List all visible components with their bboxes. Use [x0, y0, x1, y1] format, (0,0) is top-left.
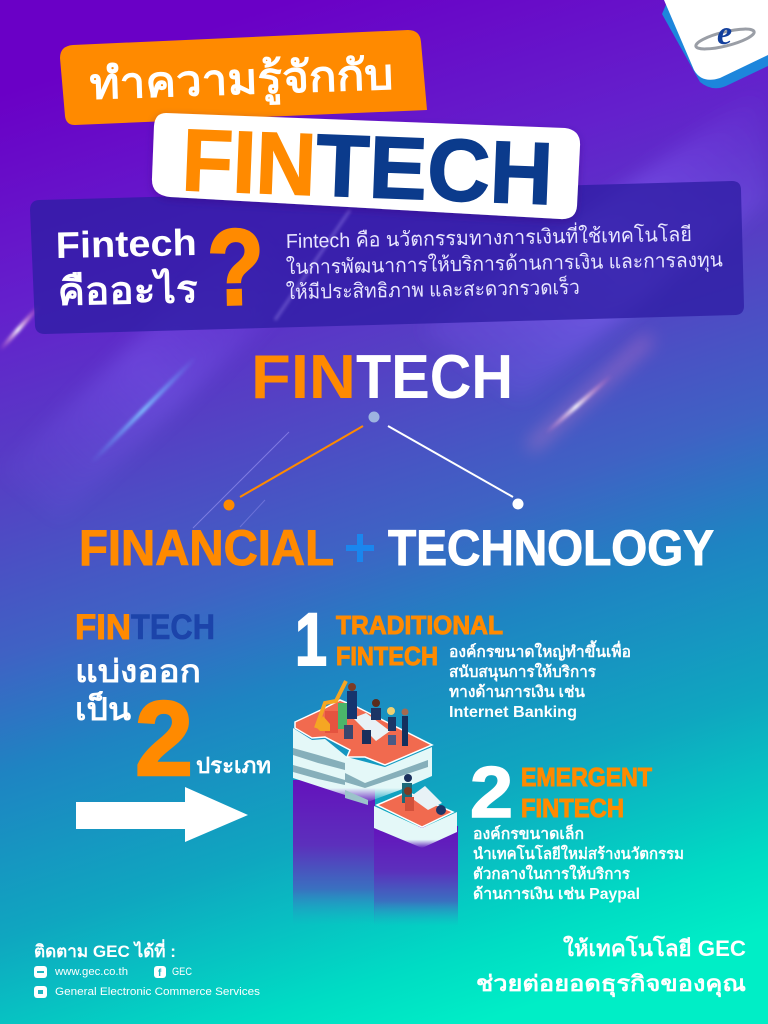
text block: two types: แบ่งออก: [75, 654, 201, 689]
item 1: traditional fintech: ทางด้านการเงิน เช่น: [449, 683, 585, 701]
item 1: traditional fintech: Internet Banking: [449, 704, 577, 721]
heading: FINTECH: TECH: [356, 343, 513, 412]
item 1: traditional fintech: FINTECH: [336, 641, 438, 671]
building floors: [293, 728, 432, 805]
tree diagram: [224, 412, 524, 510]
text block: two types: ประเภท: [196, 753, 271, 778]
item 2: emergent fintech: นำเทคโนโลยีใหม่สร้างนวัตกรรม: [473, 844, 684, 863]
item 1: traditional fintech: องค์กรขนาดใหญ่ทำขึ้นเพื่อ: [449, 640, 631, 661]
item 2: emergent fintech: ตัวกลางในการให้บริการ: [473, 864, 631, 883]
equation: financial + technology: [79, 520, 714, 576]
panel: what is fintech: [30, 181, 744, 334]
item 2: emergent fintech: FINTECH: [521, 793, 624, 823]
footer: slogan: [476, 935, 746, 998]
small building: [374, 806, 457, 848]
equation: financial + technology: FINANCIAL: [79, 520, 334, 576]
icon: question mark: ?: [206, 206, 265, 328]
footer: contacts: [34, 939, 261, 998]
roof: large building: [295, 700, 432, 765]
illustration: isometric buildings: [293, 681, 458, 926]
pillar: large building: [293, 780, 375, 925]
icon: youtube: [34, 986, 47, 998]
heading: FINTECH: [251, 343, 513, 412]
title badge: orange: [60, 30, 427, 125]
item 2: emergent fintech: ด้านการเงิน เช่น Paypal: [473, 885, 640, 903]
item 1: traditional fintech: 1: [295, 598, 327, 681]
heading: what is: คืออะไร: [57, 267, 199, 314]
text block: two types: FIN: [75, 608, 131, 647]
footer: contacts: GEC: [172, 966, 192, 978]
equation: financial + technology: TECHNOLOGY: [388, 520, 714, 576]
footer: slogan: ให้เทคโนโลยี GEC: [563, 935, 746, 961]
icon: web: [34, 966, 47, 978]
footer: contacts: ติดตาม GEC ได้ที่ :: [34, 939, 176, 961]
text block: two types: [75, 608, 271, 798]
footer: slogan: ช่วยต่อยอดธุรกิจของคุณ: [476, 971, 746, 998]
logo badge: [662, 0, 768, 88]
title card: FINTECH: [152, 110, 580, 223]
arrow: [76, 787, 248, 842]
item 1: traditional fintech: [295, 598, 631, 721]
roof: small building: [377, 792, 453, 827]
panel light streak: [275, 210, 350, 320]
title card: FINTECH: TECH: [314, 115, 555, 223]
desk and workers: [402, 774, 446, 815]
item 1: traditional fintech: สนับสนุนการให้บริการ: [449, 662, 597, 682]
icon: facebook: [154, 966, 166, 979]
text: definition: ให้มีประสิทธิภาพ และสะดวกรวดเร็ว: [286, 274, 580, 304]
item 2: emergent fintech: EMERGENT: [521, 762, 652, 792]
text: definition: ในการพัฒนาการให้บริการด้านการเงิน และการลงทุน: [286, 248, 723, 280]
item 2: emergent fintech: [470, 753, 684, 903]
title card: FINTECH: FIN: [180, 110, 318, 214]
meeting table and people: [344, 683, 408, 746]
item 2: emergent fintech: 2: [470, 753, 513, 833]
item 1: traditional fintech: TRADITIONAL: [336, 610, 503, 640]
title badge: orange: ทำความรู้จักกับ: [89, 51, 394, 111]
heading: Fintech: Fintech: [55, 222, 197, 266]
background light streaks: [0, 90, 768, 528]
icon: GEC e logo: e: [717, 15, 732, 52]
footer: contacts: www.gec.co.th: [54, 966, 128, 978]
item 2: emergent fintech: องค์กรขนาดเล็ก: [473, 823, 584, 843]
footer: contacts: General Electronic Commerce Services: [55, 986, 261, 998]
pillar: small building: [374, 826, 458, 926]
text block: two types: TECH: [131, 608, 215, 647]
chart on roof: [316, 681, 347, 733]
text block: two types: เป็น: [75, 690, 131, 727]
heading: FINTECH: FIN: [251, 343, 356, 412]
icon: facebook: f: [158, 968, 162, 979]
text: definition: Fintech คือ นวัตกรรมทางการเงินที่ใช้เทคโนโลยี: [286, 220, 692, 253]
text block: two types: 2: [135, 680, 193, 798]
text: definition: [286, 220, 723, 304]
